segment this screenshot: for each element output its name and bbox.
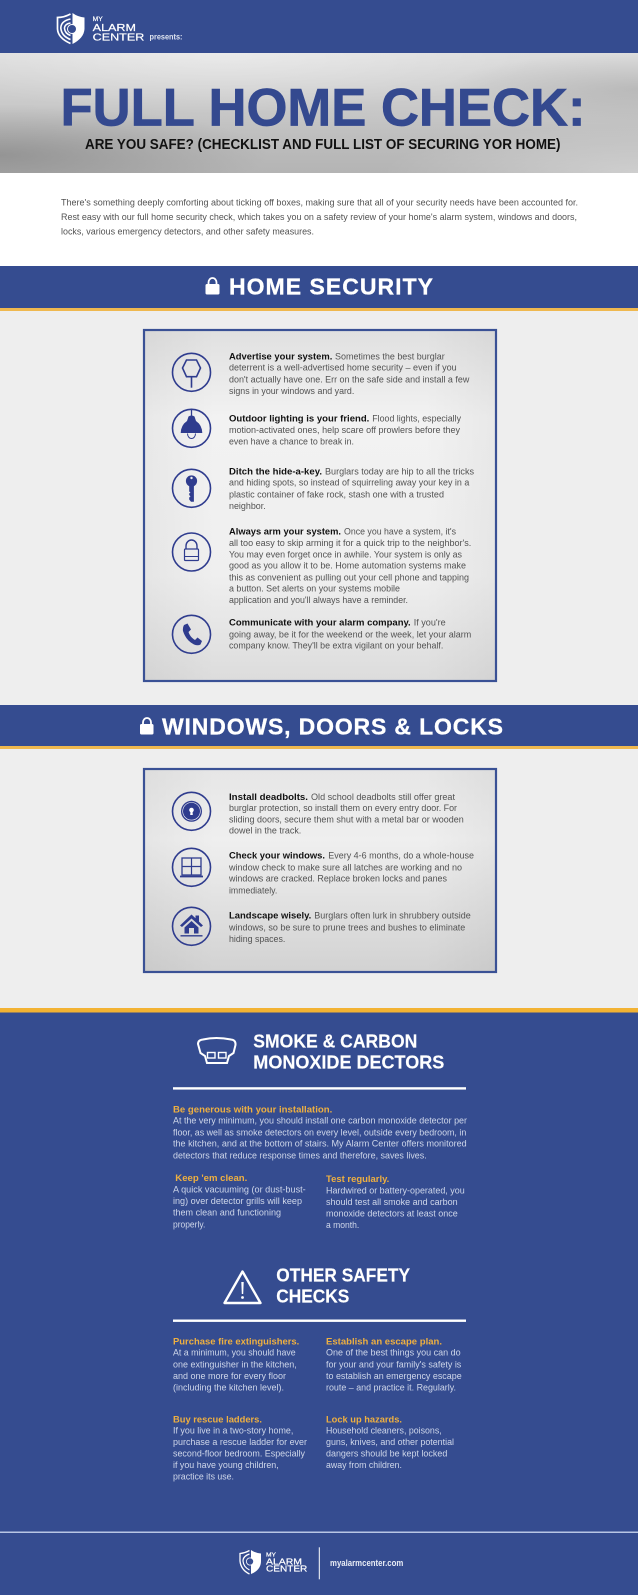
tip: check your windows: Every 4-6 months, do a whole-house [328,851,474,862]
heading: MONOXIDE DECTORS [253,1052,444,1073]
text: purchase fire extinguishers: At a minimum, you should have [173,1348,296,1359]
text: be generous: floor, as well as smoke detectors on every level, outside every bedroom, in [173,1127,466,1138]
icon: warning triangle [224,1272,260,1303]
text: buy rescue ladders [173,1415,308,1483]
tip: advertise your system: Advertise your system. [229,352,332,363]
text: purchase fire extinguishers: (including the kitchen level). [173,1383,284,1394]
tip: communicate with your alarm company: Communicate with your alarm company. [229,618,411,629]
text: lock up hazards: Household cleaners, poisons, [326,1426,442,1437]
tip: always arm your system: Always arm your system. [229,527,341,538]
text: test regularly: Test regularly. [326,1174,389,1185]
text: establish an escape plan [326,1337,462,1394]
tip: always arm your system: application and you'll always have a reminder. [229,595,408,606]
tip: check your windows: windows are cracked. Replace broken locks and panes [228,874,447,885]
tip: install deadbolts: burglar protection, so install them on every entry door. For [229,803,458,814]
top header band [0,0,638,53]
tip: check your windows [172,848,474,897]
tip: install deadbolts: Old school deadbolts still offer great [311,792,455,803]
tip: check your windows: immediately. [229,886,277,897]
tip: always arm your system: Once you have a system, it's [344,527,456,538]
icon: telephone [172,615,210,653]
text: be generous [173,1105,468,1162]
text: buy rescue ladders: If you live in a two-story home, [173,1426,293,1437]
text: be generous: the kitchen, and at the bottom of stairs. My Alarm Center offers monitored [173,1139,467,1150]
text: establish an escape plan: route – and practice it. Regularly. [326,1383,456,1394]
icon: sign [172,353,210,391]
tip: communicate with your alarm company: If you're [414,618,446,629]
heading: windows, doors and locks: WINDOWS, DOORS & LOCKS [162,713,503,739]
intro paragraph: locks, various emergency detectors, and other safety measures. [61,226,314,238]
tip: ditch the hide-a-key: Ditch the hide-a-key. [229,467,322,478]
text: lock up hazards: away from children. [326,1460,402,1471]
footer logo: CENTER [266,1563,307,1573]
tip: ditch the hide-a-key: and hiding spots, so instead of squirreling away your key in a [229,478,470,489]
icon: deadbolt [172,792,210,830]
text: be generous: detectors that reduce response times and therefore, saves lives. [173,1151,427,1162]
tip: outdoor lighting: Flood lights, especially [372,414,461,425]
tip: always arm your system: good as you allow it to be. Home automation systems make [229,561,466,572]
heading [253,1031,444,1073]
tip: advertise your system: Sometimes the best burglar [335,352,445,363]
text: keep 'em clean [173,1173,306,1230]
tip: outdoor lighting: Outdoor lighting is your friend. [229,414,369,425]
intro paragraph: Rest easy with our full home security check, which takes you on a safety review of your home's alarm system, windows and doors, [61,212,577,223]
heading: SMOKE & CARBON [253,1031,417,1052]
text: purchase fire extinguishers: one extinguisher in the kitchen, [173,1359,297,1370]
tip: landscape wisely: windows, so be sure to prune trees and bushes to eliminate [228,923,465,934]
text: be generous: Be generous with your installation. [173,1105,332,1116]
intro paragraph: There's something deeply comforting about ticking off boxes, making sure that all of your security needs have been accounted for. [61,198,578,208]
tip: advertise your system: deterrent is a well-advertised home security – even if you [229,363,457,374]
tip: communicate with your alarm company: company know. They'll be extra vigilant on your behalf. [229,641,443,652]
tip: install deadbolts: sliding doors, secure them shut with a metal bar or wooden [229,815,464,826]
footer logo: MY [266,1553,276,1559]
text: keep 'em clean: ing) over detector grills will keep [173,1196,302,1207]
title banner: brushed steel [0,53,638,173]
icon: padlock [172,533,210,571]
tip: ditch the hide-a-key: neighbor. [229,501,266,512]
text: establish an escape plan: to establish an emergency escape [326,1371,462,1382]
tip: communicate with your alarm company [172,615,471,653]
tip: landscape wisely [172,907,471,945]
tip: install deadbolts: Install deadbolts. [229,792,308,803]
text: test regularly: a month. [326,1220,359,1231]
icon: hanging lamp [172,409,210,447]
heading: OTHER SAFETY [276,1265,411,1286]
website url: myalarmcenter.com [330,1558,403,1568]
footer logo [240,1550,307,1574]
tip: ditch the hide-a-key [172,467,474,512]
icon: window [172,848,210,886]
icon: key [172,469,210,507]
icon: lock [140,718,154,734]
tip: landscape wisely: hiding spaces. [229,934,285,945]
text: establish an escape plan: for your and your family's safety is [326,1359,461,1370]
text: establish an escape plan: One of the best things you can do [326,1348,461,1359]
heading: CHECKS [276,1286,349,1307]
text: keep 'em clean: Keep 'em clean. [175,1173,247,1184]
logo: My Alarm Center: MY [93,16,104,23]
title: FULL HOME CHECK: [60,78,586,137]
section: other safety checks [173,1265,466,1483]
footer logo: ALARM [266,1556,302,1566]
text: keep 'em clean: properly. [173,1219,205,1230]
footer [0,1532,638,1579]
presents label: presents: [150,33,182,42]
light grey backdrop [0,311,638,1008]
tip: always arm your system: a button. Set alerts on your systems mobile [229,584,400,595]
icon: smoke detector [198,1038,236,1063]
text: test regularly: monoxide detectors at least once [326,1209,458,1220]
tip: ditch the hide-a-key: Burglars today are hip to all the tricks [325,467,474,478]
text: lock up hazards: dangers should be kept locked [326,1449,447,1460]
tip: outdoor lighting: even have a chance to break in. [229,437,354,448]
tip: always arm your system [172,527,471,606]
text: be generous: At the very minimum, you should install one carbon monoxide detector per [173,1116,468,1127]
panel: windows, doors and locks checklist [144,769,496,972]
text: test regularly: should test all smoke and carbon [326,1197,458,1208]
icon: lock [206,278,220,294]
tip: landscape wisely: Landscape wisely. [229,911,311,922]
text: purchase fire extinguishers: and one more for every floor [173,1371,287,1382]
tip: always arm your system: this as convenient as pulling out your cell phone and tapping [229,573,469,584]
logo: My Alarm Center: CENTER [93,32,144,43]
text: lock up hazards: guns, knives, and other potential [326,1437,454,1448]
text: test regularly [326,1174,465,1231]
text: buy rescue ladders: practice its use. [173,1472,234,1483]
logo: My Alarm Center: ALARM [93,22,136,34]
text: buy rescue ladders: Buy rescue ladders. [173,1415,262,1426]
text: keep 'em clean: them clean and functioning [173,1208,281,1219]
text: lock up hazards: Lock up hazards. [326,1415,402,1426]
section: smoke and carbon monoxide detectors [173,1031,468,1231]
tip: outdoor lighting [172,409,461,448]
text: lock up hazards [326,1415,454,1471]
tip: always arm your system: You may even forget once in awhile. Your system is only as [229,550,462,561]
tip: check your windows: window check to make sure all latches are working and no [228,863,462,874]
logo: My Alarm Center [58,13,144,44]
tip: advertise your system: don't actually have one. Err on the safe side and install a few [229,375,469,386]
tip: outdoor lighting: motion-activated ones, help scare off prowlers before they [229,425,460,436]
tip: install deadbolts: dowel in the track. [229,826,301,837]
panel: home security checklist [144,330,496,681]
icon: house [172,907,210,945]
tip: ditch the hide-a-key: plastic container of fake rock, stash one with a trusted [229,490,444,501]
tip: install deadbolts [172,792,464,837]
text: purchase fire extinguishers: Purchase fire extinguishers. [173,1337,299,1348]
heading [276,1265,411,1307]
tip: advertise your system [172,352,469,397]
heading: home security [0,266,638,311]
intro paragraph [61,198,578,238]
text: test regularly: Hardwired or battery-operated, you [326,1186,465,1197]
tip: advertise your system: signs in your windows and yard. [229,386,354,397]
tip: landscape wisely: Burglars often lurk in shrubbery outside [314,911,471,922]
tip: communicate with your alarm company: going away, be it for the weekend or the week, let your alarm [229,630,471,641]
tip: always arm your system: all too easy to skip arming it for a quick trip to the neighbor's. [229,538,471,549]
subtitle: ARE YOU SAFE? (CHECKLIST AND FULL LIST OF SECURING YOR HOME) [85,137,561,153]
heading: windows, doors and locks [0,705,638,749]
text: establish an escape plan: Establish an escape plan. [326,1337,442,1348]
heading: home security: HOME SECURITY [229,274,433,300]
tip: check your windows: Check your windows. [229,851,325,862]
text: buy rescue ladders: if you have young children, [173,1460,279,1471]
text: keep 'em clean: A quick vacuuming (or dust-bust- [173,1185,306,1196]
text: purchase fire extinguishers [173,1337,299,1394]
text: buy rescue ladders: purchase a rescue ladder for ever [173,1437,308,1448]
lower blue section [0,1008,638,1595]
text: buy rescue ladders: second-floor bedroom. Especially [173,1449,305,1460]
